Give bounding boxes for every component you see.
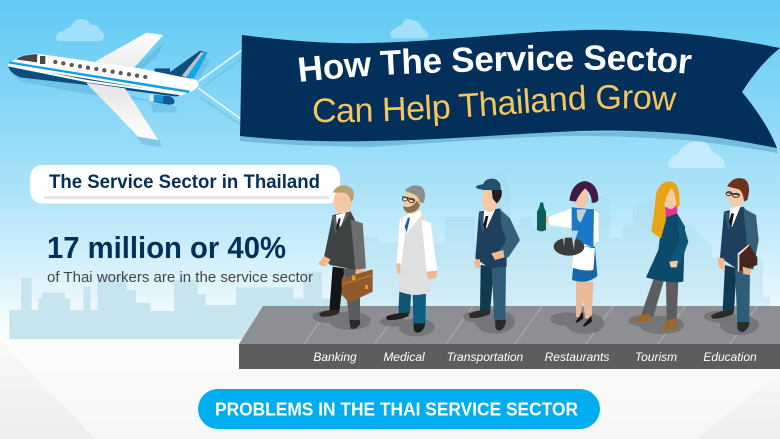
banner title line 2: Can Help Thailand Grow <box>314 84 676 126</box>
section heading pill <box>30 165 340 204</box>
background sky <box>0 0 780 340</box>
plane front wing <box>86 83 158 140</box>
skyline: left <box>9 272 350 339</box>
figure: transport worker <box>463 179 520 334</box>
plane rear wing <box>95 33 163 68</box>
plane shadow <box>10 42 210 147</box>
plane door <box>40 56 45 64</box>
banner shadow <box>240 96 777 153</box>
figure: banker <box>313 185 373 330</box>
banner ribbon <box>240 30 780 148</box>
label: medical: Medical <box>383 350 425 364</box>
plane engine <box>150 94 174 105</box>
plane cockpit <box>16 54 37 62</box>
platform <box>239 306 780 369</box>
lower background <box>0 339 780 439</box>
call-to-action text: PROBLEMS IN THE THAI SERVICE SECTOR <box>215 398 578 420</box>
plane tail fin <box>166 51 208 78</box>
figure: teacher <box>704 178 759 335</box>
label: tourism: Tourism <box>635 350 677 364</box>
figure: doctor <box>380 185 437 336</box>
label: banking: Banking <box>313 350 357 364</box>
plane fuselage <box>8 53 199 97</box>
figures: restaurants, tourism, education <box>537 178 759 335</box>
tow ropes <box>198 50 242 125</box>
title banner <box>240 30 780 153</box>
statistic <box>47 230 313 286</box>
plane upper engine <box>154 68 170 74</box>
cloud: upper left <box>56 19 104 41</box>
platform top <box>239 306 780 344</box>
plane windows <box>53 60 147 79</box>
statistic description: of Thai workers are in the service sector <box>47 269 313 286</box>
cloud: right <box>668 140 725 168</box>
platform front <box>239 344 780 369</box>
figure: waitress <box>537 181 604 334</box>
platform tile lines <box>304 306 757 344</box>
airplane <box>8 33 210 147</box>
section heading text: The Service Sector in Thailand <box>49 172 320 193</box>
label: restaurants: Restaurants <box>545 350 609 364</box>
label: transportation: Transportation <box>447 350 524 364</box>
statistic number: 17 million or 40% <box>47 230 286 265</box>
figure: tourist <box>628 181 688 334</box>
banner title line 1: How The Service Sector <box>298 44 692 82</box>
cloud: behind banner <box>390 19 428 38</box>
figures: banking, medical, transportation <box>313 179 520 336</box>
label: education: Education <box>703 350 757 364</box>
skyline: right <box>340 172 770 310</box>
call-to-action pill <box>198 389 600 429</box>
